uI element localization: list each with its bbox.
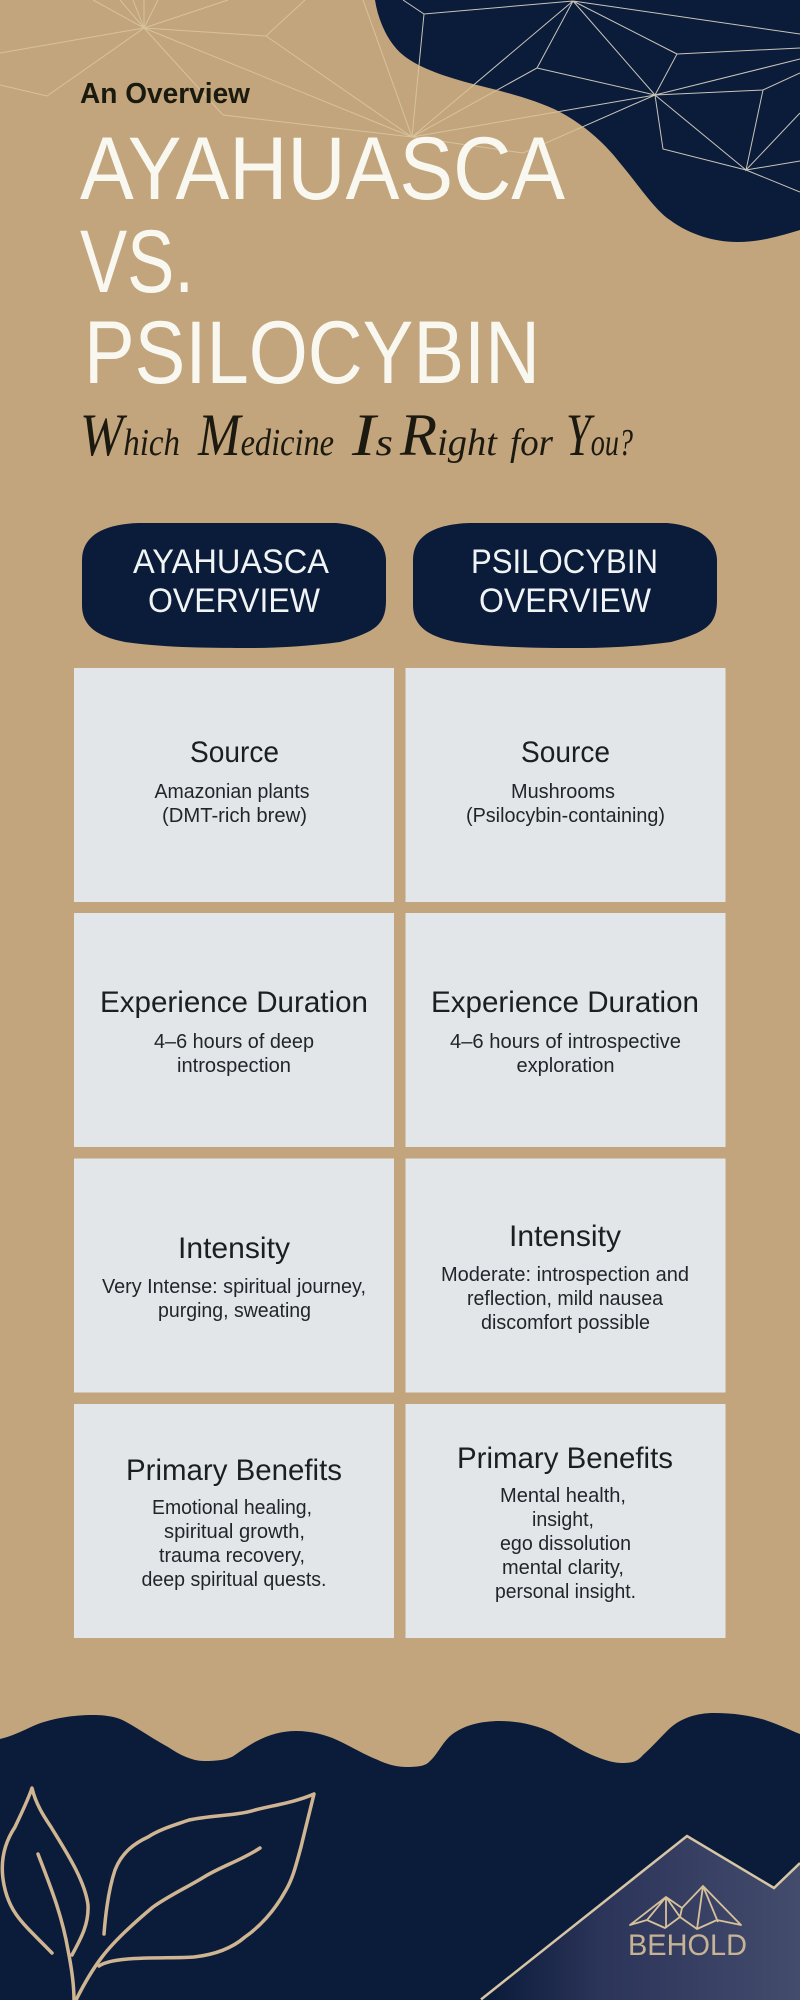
card: Psilocybin benefits: insight,: [532, 1509, 594, 1531]
card: Psilocybin benefits: ego dissolution: [500, 1533, 631, 1555]
card: Ayahuasca benefits: deep spiritual quests.: [142, 1569, 326, 1591]
script subtitle: Is: [351, 402, 393, 468]
icon: leaves: [2, 1788, 314, 2000]
card: Psilocybin source: Mushrooms: [511, 781, 615, 803]
card: Ayahuasca intensity: Very Intense: spiritual journey,: [102, 1276, 366, 1298]
card: Psilocybin source: Source: [521, 736, 610, 769]
card: Ayahuasca duration: 4–6 hours of deep: [154, 1031, 314, 1053]
column header: Ayahuasca overview: [82, 523, 386, 648]
card: Psilocybin benefits: personal insight.: [495, 1581, 636, 1603]
card: Psilocybin duration: Experience Duration: [431, 986, 699, 1019]
card: Psilocybin benefits: Primary Benefits: [457, 1442, 673, 1475]
geometric line web on tan: [0, 0, 655, 153]
card: Ayahuasca source: Source: [190, 736, 279, 769]
column header: Ayahuasca overview: OVERVIEW: [148, 582, 320, 620]
card: Psilocybin benefits: mental clarity,: [502, 1557, 624, 1579]
card: Psilocybin intensity: Moderate: introspection and: [441, 1264, 689, 1286]
bottom navy wave: [0, 1713, 800, 2000]
script subtitle: You?: [566, 402, 633, 468]
script subtitle: for: [510, 422, 553, 464]
script subtitle: [80, 402, 633, 468]
card: Psilocybin benefits: [406, 1404, 726, 1638]
card: Psilocybin duration: [406, 913, 726, 1147]
card: Psilocybin source: [406, 668, 726, 902]
card: Ayahuasca duration: [74, 913, 394, 1147]
card: Ayahuasca source: (DMT-rich brew): [162, 805, 307, 827]
card: Ayahuasca duration: Experience Duration: [100, 986, 368, 1019]
card: Ayahuasca benefits: Primary Benefits: [126, 1454, 342, 1487]
card: Psilocybin intensity: reflection, mild nausea: [467, 1288, 664, 1310]
eyebrow: An Overview: An Overview: [80, 78, 250, 110]
column header: Ayahuasca overview: AYAHUASCA: [133, 543, 329, 581]
logo: Behold: [628, 1886, 747, 1962]
card: Ayahuasca benefits: Emotional healing,: [152, 1497, 312, 1519]
card: Ayahuasca intensity: [74, 1158, 394, 1392]
title: VS.: [80, 211, 194, 311]
card: Psilocybin benefits: Mental health,: [500, 1485, 626, 1507]
mountain outline panel: [481, 1836, 800, 2000]
top-right navy blob: [375, 0, 800, 242]
mountain outline stroke: [481, 1836, 800, 2000]
script subtitle: Right: [399, 402, 498, 468]
card: Ayahuasca duration: introspection: [177, 1055, 291, 1077]
card: Psilocybin duration: 4–6 hours of introspective: [450, 1031, 681, 1053]
card: Ayahuasca source: [74, 668, 394, 902]
column header: Psilocybin overview: [413, 523, 717, 648]
card: Ayahuasca benefits: spiritual growth,: [164, 1521, 305, 1543]
title: [80, 118, 566, 402]
card: Ayahuasca benefits: [74, 1404, 394, 1638]
card: Psilocybin intensity: Intensity: [509, 1220, 621, 1253]
script subtitle: Medicine: [197, 402, 334, 468]
geometric line web on navy: [403, 0, 800, 192]
card: Ayahuasca source: Amazonian plants: [154, 781, 310, 803]
card: Ayahuasca intensity: Intensity: [178, 1232, 290, 1265]
card: Psilocybin duration: exploration: [516, 1055, 614, 1077]
script subtitle: Which: [80, 402, 180, 468]
card: Psilocybin intensity: discomfort possible: [481, 1312, 650, 1334]
column header: Psilocybin overview: PSILOCYBIN: [471, 543, 658, 581]
title: PSILOCYBIN: [84, 302, 540, 402]
card: Psilocybin source: (Psilocybin-containing): [466, 805, 665, 827]
card: Psilocybin intensity: [406, 1158, 726, 1392]
column header: Psilocybin overview: OVERVIEW: [479, 582, 651, 620]
logo: Behold: BEHOLD: [628, 1929, 747, 1962]
title: AYAHUASCA: [80, 118, 566, 218]
card: Ayahuasca intensity: purging, sweating: [158, 1300, 311, 1322]
card: Ayahuasca benefits: trauma recovery,: [159, 1545, 305, 1567]
